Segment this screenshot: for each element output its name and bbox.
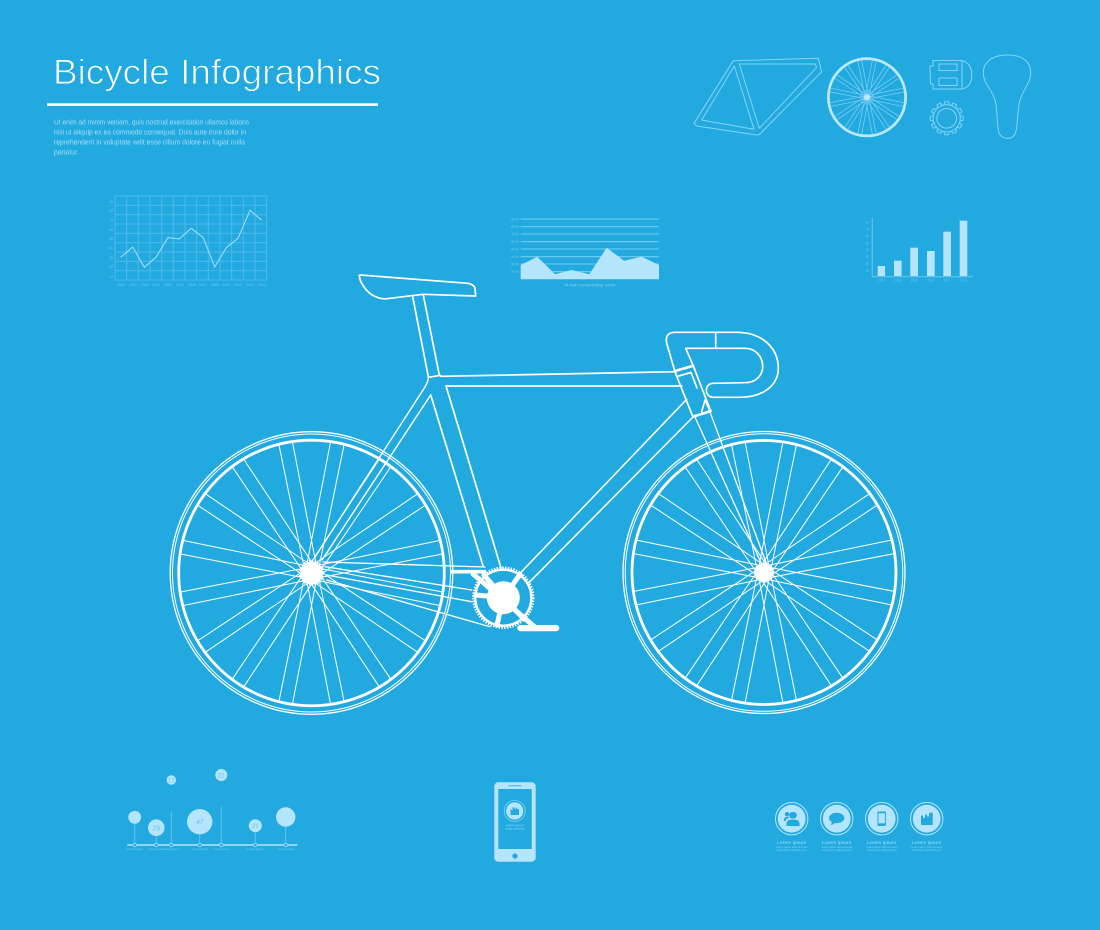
timeline labels: Lorem ipsum [163,847,180,851]
feature: phone: Lorem ipsum dolor sit amet [866,845,898,849]
timeline labels: Lorem ipsum [192,847,208,851]
axis labels: 40% [511,254,519,259]
axis labels: 2012 [258,283,266,287]
icon: wheel [828,59,906,136]
axis labels: 30 [109,256,113,260]
intro text block: pariatur. [54,148,79,156]
bicycle [170,275,905,714]
feature: bar graph: Lorem ipsum [912,840,941,846]
intro text block [54,118,249,156]
timeline nodes [133,843,288,847]
icon: saddle [983,55,1031,138]
timeline bubbles [128,769,295,836]
axis labels: 2010 [234,283,242,287]
crank bar [450,570,486,574]
timeline axis [127,844,297,846]
axis labels: 20 [866,262,869,266]
timeline labels [127,847,294,851]
axis labels: 2007 [199,283,207,287]
timeline labels: Lorem ipsum [213,847,230,851]
axis labels: 70 [109,218,113,222]
axes [872,218,973,277]
axis labels: 40 [109,246,113,250]
phone screen [498,789,532,849]
title underline [47,103,378,106]
seat tube [431,386,501,568]
chart grid [115,196,267,280]
axis labels: 2003 [152,283,160,287]
feature: people: Lorem ipsum [777,840,806,846]
intro text block: Ut enim ad minim veniam, quis nostrud exercitation ullamco laboris [54,118,249,126]
axis labels: 60% [511,239,519,244]
feature icons row [776,802,943,852]
feature: bar graph: Lorem ipsum dolor sit amet [911,845,943,849]
fork [695,412,767,565]
head tube collars [675,366,711,417]
home button [512,853,518,859]
axis labels: 80 [109,209,113,213]
data line [121,210,262,267]
feature: phone: Lorem ipsum [867,840,896,846]
down tube [520,399,695,583]
feature: phone [866,802,898,852]
timeline labels: Lorem ipsum [127,847,143,851]
axis labels: 2008 [894,278,902,282]
bar chart [866,218,973,282]
area [521,248,659,279]
icon: smartphone [494,782,536,862]
saddle [359,275,476,299]
axis labels: 30 [866,255,869,259]
title: Bicycle Infographics [53,53,381,92]
chart caption: In non consectetur enim. [564,282,617,288]
feature: bar graph [910,802,943,852]
axis labels: 90% [511,216,519,222]
timeline labels: Lorem ipsum [247,847,264,851]
bubble numbers [152,773,259,832]
axis labels: 2008 [211,283,219,287]
axis labels: 50 [109,237,113,241]
timeline labels: Lorem ipsum [148,847,165,851]
chain stays [323,562,490,627]
axis labels: 80 [866,220,869,224]
screen badge [504,800,525,822]
axis labels: 2011 [944,278,951,282]
axis labels: 2001 [129,283,137,287]
axis labels: 2006 [188,283,196,287]
area chart [511,216,659,288]
screen text: dolor sit amet [505,827,525,831]
spider arms [476,574,524,625]
timeline stems [135,807,286,845]
timeline chart [127,769,297,851]
handlebar [666,332,778,397]
axis labels: 2002 [141,283,149,287]
icon: sprocket [930,102,963,135]
axis labels: 2005 [176,283,184,287]
seat stays [315,378,431,560]
pedal [517,625,559,631]
axis labels [109,200,266,287]
bubble numbers: 29 [152,825,160,832]
chainring and crank [450,568,559,631]
axis labels: 2009 [222,283,230,287]
axis labels: 2009 [910,278,918,282]
axis labels: 90 [109,200,113,204]
line chart [109,196,267,287]
icon: pedal [930,60,972,89]
timeline labels: Lorem ipsum [278,847,294,851]
top tube [441,372,682,386]
feature: speech bubble: Lorem ipsum dolor sit amet [821,845,853,849]
axis labels: 2012 [960,278,968,282]
axis labels [866,220,968,282]
feature: phone: consectetur adipiscing elit [867,848,897,852]
intro text block: nisi ut aliquip ex ea commodo consequat. Duis aute irure dolor in [54,128,246,136]
bars [878,221,967,276]
head tube [675,366,711,417]
intro text block: reprehenderit in voluptate velit esse cillum dolore eu fugiat nulla [54,138,246,146]
axis labels: 20% [511,269,519,274]
axis labels: 30% [511,262,519,266]
axis labels: 2007 [878,278,886,282]
screen text [505,824,525,831]
axis labels: 80% [511,224,519,229]
feature: speech bubble: consectetur adipiscing elit [822,848,852,852]
axis labels: 2010 [927,278,935,282]
chainring teeth [473,568,533,628]
feature: people [776,802,808,852]
axis labels [511,216,519,274]
axis labels: 2011 [246,283,254,287]
phone speaker [508,785,522,786]
feature: bar graph: consectetur adipiscing elit [912,848,942,852]
phone body [494,782,536,862]
axis labels: 70 [866,228,869,232]
axis labels: 50 [866,242,869,246]
chainring [475,570,531,626]
icon: frame [694,58,822,135]
axis labels: 2000 [117,283,125,287]
feature: people: Lorem ipsum dolor sit amet [776,845,808,849]
axis labels: 2004 [164,283,172,287]
bubble numbers: 17 [168,778,175,784]
axis labels: 40 [866,248,869,252]
seat post [413,295,441,377]
icon: bike parts [694,55,1031,138]
screen text: Lorem ipsum [506,824,525,828]
axis labels: 60 [866,234,869,238]
axis labels: 20 [109,265,113,269]
axis labels: 70% [511,232,519,236]
axis labels: 60 [109,228,113,232]
bubble numbers: 47 [196,819,204,826]
front wheel [623,432,905,714]
frame [315,275,778,627]
feature: speech bubble [820,802,853,852]
feature: people: consectetur adipiscing elit [777,848,807,852]
axis labels: 10 [109,275,113,279]
axis labels: 10 [866,269,869,273]
bubble numbers: 22 [218,773,225,779]
chainring centre [487,581,520,614]
rear wheel [170,432,453,714]
chart lines [521,219,659,272]
feature: speech bubble: Lorem ipsum [822,840,851,846]
bubble numbers: 21 [252,824,259,830]
axis labels: 50% [511,246,519,252]
crank arm [472,573,536,628]
